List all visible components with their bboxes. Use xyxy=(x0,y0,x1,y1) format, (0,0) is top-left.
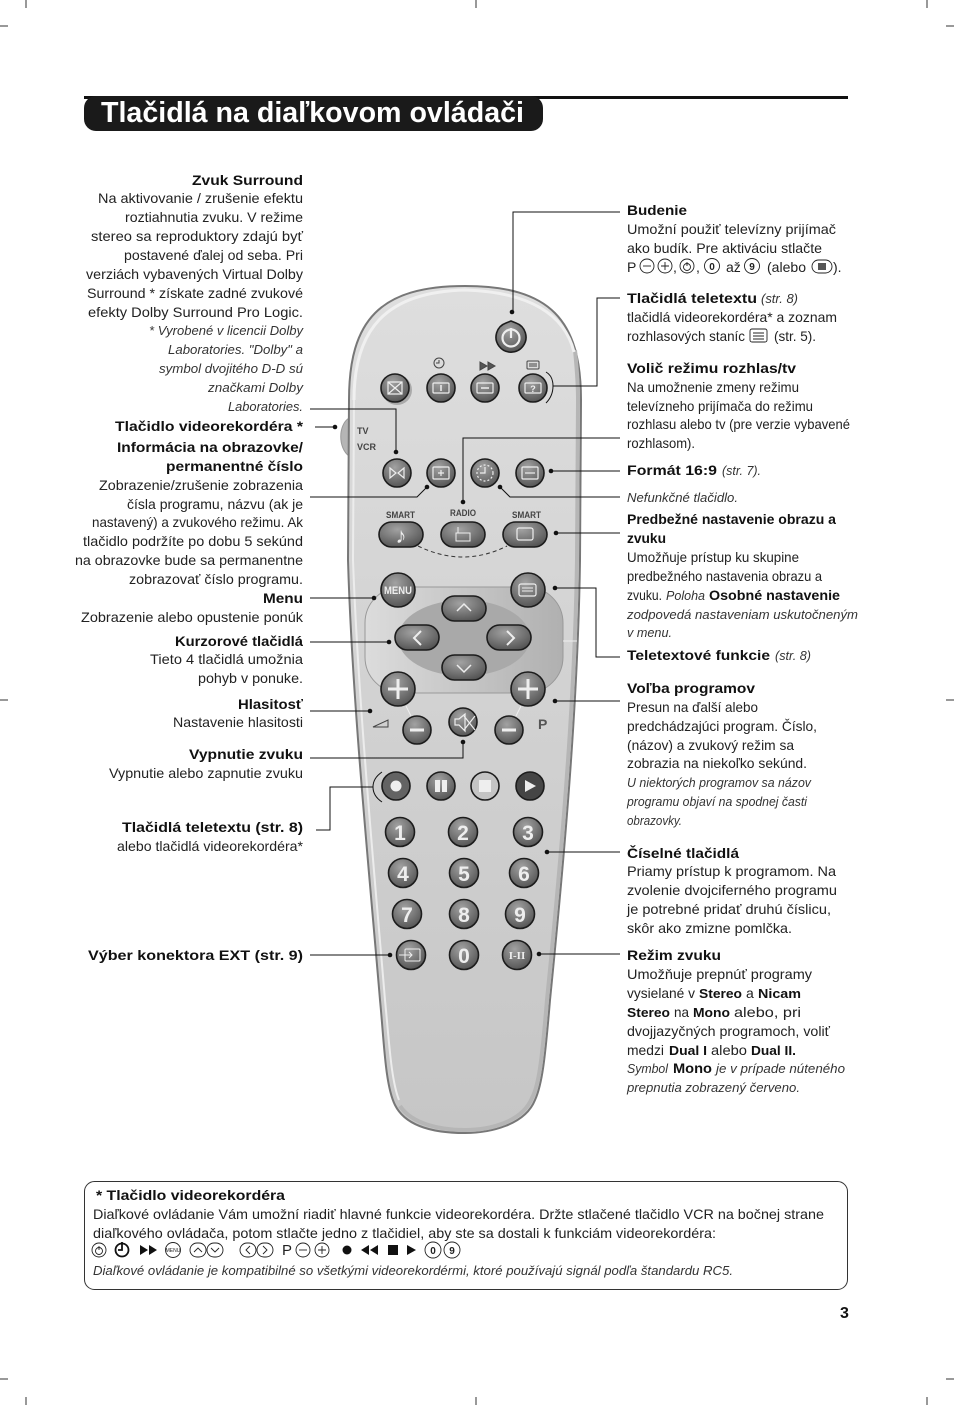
text: Zvuk Surround: postavené ďalej od seba. Pri xyxy=(124,247,303,263)
text: Informácia na obrazovke: permanentné číslo xyxy=(166,458,303,474)
smart radio labels: SMART xyxy=(386,510,415,520)
text: Režim zvuku: Dual I xyxy=(669,1043,707,1058)
text: Menu: Menu xyxy=(263,590,303,606)
number buttons: 5 xyxy=(458,863,470,886)
text: Formát 16:9: (str. 7). xyxy=(722,463,761,478)
text: Predbežné nastavenie: zvuku xyxy=(627,530,666,546)
text: Hlasitosť xyxy=(173,696,303,730)
text: Informácia na obrazovke: nastavený) a zvukového režimu. Ak xyxy=(92,514,304,530)
text: Zvuk Surround: Na aktivovanie / zrušenie efektu xyxy=(98,190,303,206)
text: Režim zvuku: Stereo xyxy=(627,1005,670,1020)
text: Voľba programov: obrazovky. xyxy=(627,813,682,828)
menu and teletext buttons xyxy=(381,573,545,607)
text: Režim zvuku xyxy=(626,947,845,1095)
text: Predbežné nastavenie: Poloha xyxy=(666,588,705,603)
text: Režim zvuku: Nicam xyxy=(758,986,801,1001)
text: Informácia na obrazovke: na obrazovke bude sa permanentne xyxy=(75,552,303,568)
text: Režim zvuku: alebo, pri xyxy=(734,1004,801,1020)
number buttons xyxy=(386,818,542,970)
text: Tlačidlá teletextu left: alebo tlačidlá videorekordéra* xyxy=(117,838,304,854)
smart radio labels xyxy=(386,508,541,520)
text: Vypnutie zvuku: Vypnutie alebo zapnutie zvuku xyxy=(109,765,303,781)
text: Volič režimu: televízneho prijímača do režimu xyxy=(627,398,813,414)
text: Budenie: až xyxy=(726,259,741,275)
text: Predbežné nastavenie xyxy=(626,511,858,640)
text: Budenie: 0 xyxy=(709,262,715,273)
icon row: 0 xyxy=(430,1246,436,1257)
text: Zvuk Surround xyxy=(86,172,305,414)
text: Voľba programov: zobrazia na niekoľko sekúnd. xyxy=(627,755,807,771)
text: Zvuk Surround: Laboratories. xyxy=(228,399,303,414)
top row icons xyxy=(434,358,539,370)
number buttons: 1 xyxy=(394,822,406,845)
text: Teletextové funkcie: Teletextové funkcie xyxy=(627,647,770,663)
volume and program buttons xyxy=(373,672,547,744)
text: Režim zvuku: a xyxy=(746,985,754,1001)
number buttons: 8 xyxy=(458,904,470,927)
text: Informácia na obrazovke: tlačidlo podržíte po dobu 5 sekúnd xyxy=(83,533,303,549)
text: Hlasitosť: Hlasitosť xyxy=(238,696,303,712)
text: Režim zvuku: dvojjazyčných programoch, voliť xyxy=(627,1023,831,1039)
text: Voľba programov: (názov) a zvukový režim sa xyxy=(627,737,794,753)
text: Zvuk Surround: roztiahnutia zvuku. V režime xyxy=(125,209,303,225)
callout: VCR note: Diaľkové ovládanie je kompatibilné so všetkými videorekordérmi, ktoré používajú signál podľa štandardu RC5. xyxy=(93,1263,733,1278)
smart radio labels: SMART xyxy=(512,510,541,520)
text: Voľba programov xyxy=(626,680,817,828)
text: Číselné tlačidlá: Priamy prístup k programom. Na xyxy=(627,863,836,879)
text: Formát 16:9: Formát 16:9 xyxy=(627,462,717,478)
text: Režim zvuku: Mono xyxy=(693,1005,730,1020)
text: Predbežné nastavenie: zvuku. xyxy=(627,587,662,603)
text: Zvuk Surround: symbol dvojitého D-D sú xyxy=(159,361,303,376)
text: Budenie: Umožní použiť televízny prijímač xyxy=(627,221,836,237)
top row buttons xyxy=(381,374,547,405)
number buttons: 9 xyxy=(514,904,526,927)
callout: VCR note: * Tlačidlo videorekordéra xyxy=(96,1187,285,1203)
text: Predbežné nastavenie: Predbežné nastavenie obrazu a xyxy=(627,511,836,527)
side switch xyxy=(341,418,349,456)
text: Režim zvuku: Mono xyxy=(673,1060,712,1076)
remote control xyxy=(341,286,581,1133)
number buttons: 2 xyxy=(457,822,469,845)
remote body xyxy=(348,286,581,1133)
playback buttons xyxy=(382,772,544,800)
text: Tlačidlá teletextu left: Tlačidlá teletextu (str. 8) xyxy=(122,819,303,835)
text: Informácia na obrazovke: čísla programu, názvu (ak je xyxy=(127,496,303,512)
text: Hlasitosť: Nastavenie hlasitosti xyxy=(173,714,303,730)
text: Zvuk Surround: efekty Dolby Surround Pro Logic. xyxy=(88,304,303,320)
text: Menu xyxy=(81,590,304,625)
text: Budenie: ). xyxy=(833,259,842,275)
icon row xyxy=(92,1242,460,1259)
text: Informácia na obrazovke: Informácia na obrazovke/ xyxy=(117,439,303,455)
menu and teletext buttons: MENU xyxy=(384,585,412,597)
text: Tlačidlá teletextu right: tlačidlá videorekordéra* a zoznam xyxy=(627,309,837,325)
text: Tlačidlá teletextu right: rozhlasových staníc xyxy=(627,328,745,344)
text: Teletextové funkcie: (str. 8) xyxy=(775,648,811,663)
text: Voľba programov: predchádzajúci program. Číslo, xyxy=(627,718,817,734)
text: Tlačidlo videorekordéra: Tlačidlo videorekordéra * xyxy=(115,418,304,434)
text: Budenie: P xyxy=(627,259,636,275)
text: Výber konektora EXT: Výber konektora EXT (str. 9) xyxy=(88,947,303,963)
text: Zvuk Surround: Zvuk Surround xyxy=(192,172,303,188)
number buttons: 3 xyxy=(522,822,534,845)
standby button xyxy=(496,321,526,352)
text: Zvuk Surround: * Vyrobené v licencii Dolby xyxy=(149,323,305,338)
smart radio labels: RADIO xyxy=(450,508,476,518)
text: Režim zvuku: alebo xyxy=(711,1042,747,1058)
text: Číselné tlačidlá: Číselné tlačidlá xyxy=(627,844,739,861)
text: Predbežné nastavenie: predbežného nastavenia obrazu a xyxy=(627,568,822,584)
text: Režim zvuku: Symbol xyxy=(627,1061,669,1076)
text: Číselné tlačidlá: zvolenie dvojciferného programu xyxy=(627,882,837,898)
text: Formát 16:9 xyxy=(627,462,761,478)
text: Režim zvuku: na xyxy=(674,1004,689,1020)
text: Režim zvuku: Režim zvuku xyxy=(627,947,721,963)
text: Predbežné nastavenie: v menu. xyxy=(627,625,672,640)
text: Režim zvuku: medzi xyxy=(627,1042,664,1058)
text: Budenie: 9 xyxy=(749,262,755,273)
text: Predbežné nastavenie: zodpovedá nastaveniam uskutočneným xyxy=(626,607,858,622)
text: Tlačidlá teletextu right xyxy=(627,290,837,344)
number buttons: 0 xyxy=(458,945,470,968)
page number: 3 xyxy=(840,1305,849,1322)
text: Budenie xyxy=(627,202,842,275)
text: Režim zvuku: Dual II. xyxy=(751,1043,796,1058)
text: Voľba programov: programu objaví na spodnej časti xyxy=(626,794,808,809)
callout: VCR note xyxy=(84,1182,848,1290)
text: Režim zvuku: Umožňuje prepnúť programy xyxy=(627,966,812,982)
text: Kurzorové tlačidlá: Kurzorové tlačidlá xyxy=(175,633,303,649)
text: Tlačidlá teletextu right: Tlačidlá teletextu xyxy=(627,290,757,306)
text: Tlačidlá teletextu right: (str. 5). xyxy=(774,328,816,344)
text: Budenie: Budenie xyxy=(627,202,687,218)
callout: VCR note: diaľkového ovládača, potom stlačte jedno z tlačidiel, aby ste sa dostali k funkciám videorekordéra: xyxy=(93,1225,716,1241)
icon row: P xyxy=(282,1242,292,1259)
volume and program buttons: P xyxy=(538,716,547,732)
text: Režim zvuku: vysielané v xyxy=(627,985,695,1001)
text: Kurzorové tlačidlá: Tieto 4 tlačidlá umožnia xyxy=(150,651,303,667)
smart and radio buttons: ♪ xyxy=(396,523,406,548)
text: Voľba programov: Voľba programov xyxy=(627,680,755,696)
text: Číselné tlačidlá xyxy=(626,844,837,936)
number buttons: 7 xyxy=(401,904,413,927)
text: Kurzorové tlačidlá xyxy=(150,633,303,686)
text: Zvuk Surround: značkami Dolby xyxy=(207,380,305,395)
text: Volič režimu xyxy=(627,360,850,451)
text: Predbežné nastavenie: Osobné nastavenie xyxy=(709,587,840,603)
icon row: MENU xyxy=(166,1248,181,1254)
text: Informácia na obrazovke xyxy=(75,439,304,587)
text: Volič režimu: Na umožnenie zmeny režimu xyxy=(627,379,799,395)
title banner: Tlačidlá na diaľkovom ovládači xyxy=(101,97,524,129)
text: Režim zvuku: Stereo xyxy=(699,986,742,1001)
text: Nefunkčné tlačidlo: Nefunkčné tlačidlo. xyxy=(627,490,738,505)
cursor panel xyxy=(365,587,563,693)
cursor buttons xyxy=(395,596,531,680)
top row buttons: ? xyxy=(530,384,536,394)
text: Volič režimu: Volič režimu rozhlas/tv xyxy=(627,360,796,376)
text: Zvuk Surround: verziách vybavených Virtual Dolby xyxy=(86,266,303,282)
text: Menu: Zobrazenie alebo opustenie ponúk xyxy=(81,609,304,625)
second row buttons xyxy=(383,459,544,487)
tv vcr labels: TV xyxy=(357,426,369,436)
callout: VCR note: Diaľkové ovládanie Vám umožní riadiť hlavné funkcie videorekordéra. Držte stlačené tlačidlo VCR na bočnej strane xyxy=(93,1206,824,1222)
tv vcr labels xyxy=(357,426,377,452)
text: Zvuk Surround: Surround * získate zadné zvukové xyxy=(87,285,303,301)
text: Zvuk Surround: Laboratories. "Dolby" a xyxy=(168,342,303,357)
text: Budenie: (alebo xyxy=(767,259,806,275)
text: Volič režimu: rozhlasom). xyxy=(627,435,695,451)
text: Predbežné nastavenie: Umožňuje prístup ku skupine xyxy=(627,549,799,565)
text: Zvuk Surround: stereo sa reproduktory zdajú byť xyxy=(91,228,304,244)
text: Číselné tlačidlá: skôr ako zmizne pomlčka. xyxy=(627,920,792,936)
number buttons: 4 xyxy=(397,863,409,886)
text: Budenie: , xyxy=(696,259,700,275)
text: Kurzorové tlačidlá: pohyb v ponuke. xyxy=(198,670,303,686)
text: Vypnutie zvuku: Vypnutie zvuku xyxy=(189,746,303,762)
text: Budenie: , xyxy=(673,259,677,275)
icon row: 9 xyxy=(449,1246,455,1257)
text: Voľba programov: U niektorých programov sa názov xyxy=(627,775,812,790)
text: Tlačidlá teletextu right: (str. 8) xyxy=(761,291,798,306)
text: Voľba programov: Presun na ďalší alebo xyxy=(627,699,758,715)
smart and radio buttons xyxy=(379,522,547,557)
text: Tlačidlá teletextu left xyxy=(117,819,304,854)
text: Informácia na obrazovke: zobrazovať číslo programu. xyxy=(129,571,303,587)
text: Budenie: ako budík. Pre aktiváciu stlačte xyxy=(627,240,822,256)
text: Informácia na obrazovke: Zobrazenie/zrušenie zobrazenia xyxy=(99,477,303,493)
number buttons: I-II xyxy=(509,950,525,962)
tv vcr labels: VCR xyxy=(357,442,377,452)
text: Režim zvuku: je v prípade núteného xyxy=(714,1061,845,1076)
text: Režim zvuku: prepnutia zobrazený červeno. xyxy=(626,1080,800,1095)
text: Vypnutie zvuku xyxy=(109,746,303,781)
text: Volič režimu: rozhlasu alebo tv (pre verzie vybavené xyxy=(627,416,850,432)
leader lines xyxy=(310,212,620,957)
text: Číselné tlačidlá: je potrebné pridať druhú číslicu, xyxy=(626,901,831,917)
title banner xyxy=(84,96,848,131)
number buttons: 6 xyxy=(518,863,530,886)
